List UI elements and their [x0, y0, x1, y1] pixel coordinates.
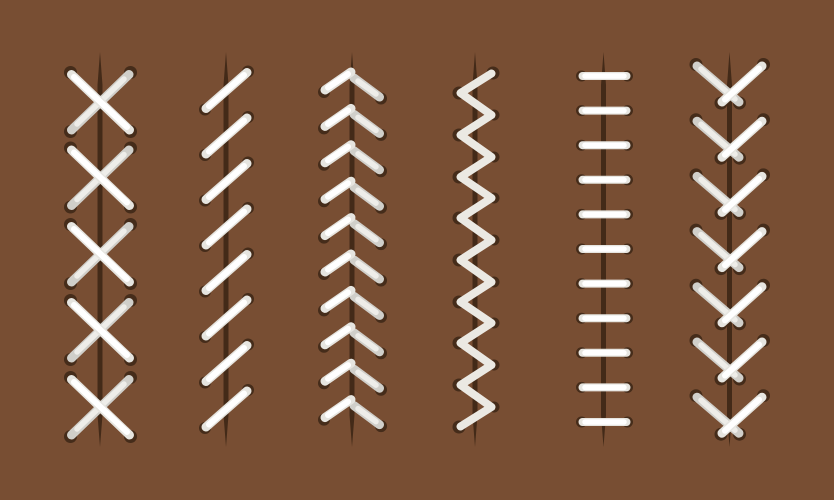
column 4: zigzag stitch [452, 52, 500, 447]
column 1: cross stitch [64, 52, 137, 447]
column 6: overlapping vee stitch [690, 52, 770, 447]
column 3: chevron stitch [318, 52, 387, 447]
column 2: slanted stitch [199, 52, 254, 447]
column 5: straight bar stitch [576, 52, 633, 447]
